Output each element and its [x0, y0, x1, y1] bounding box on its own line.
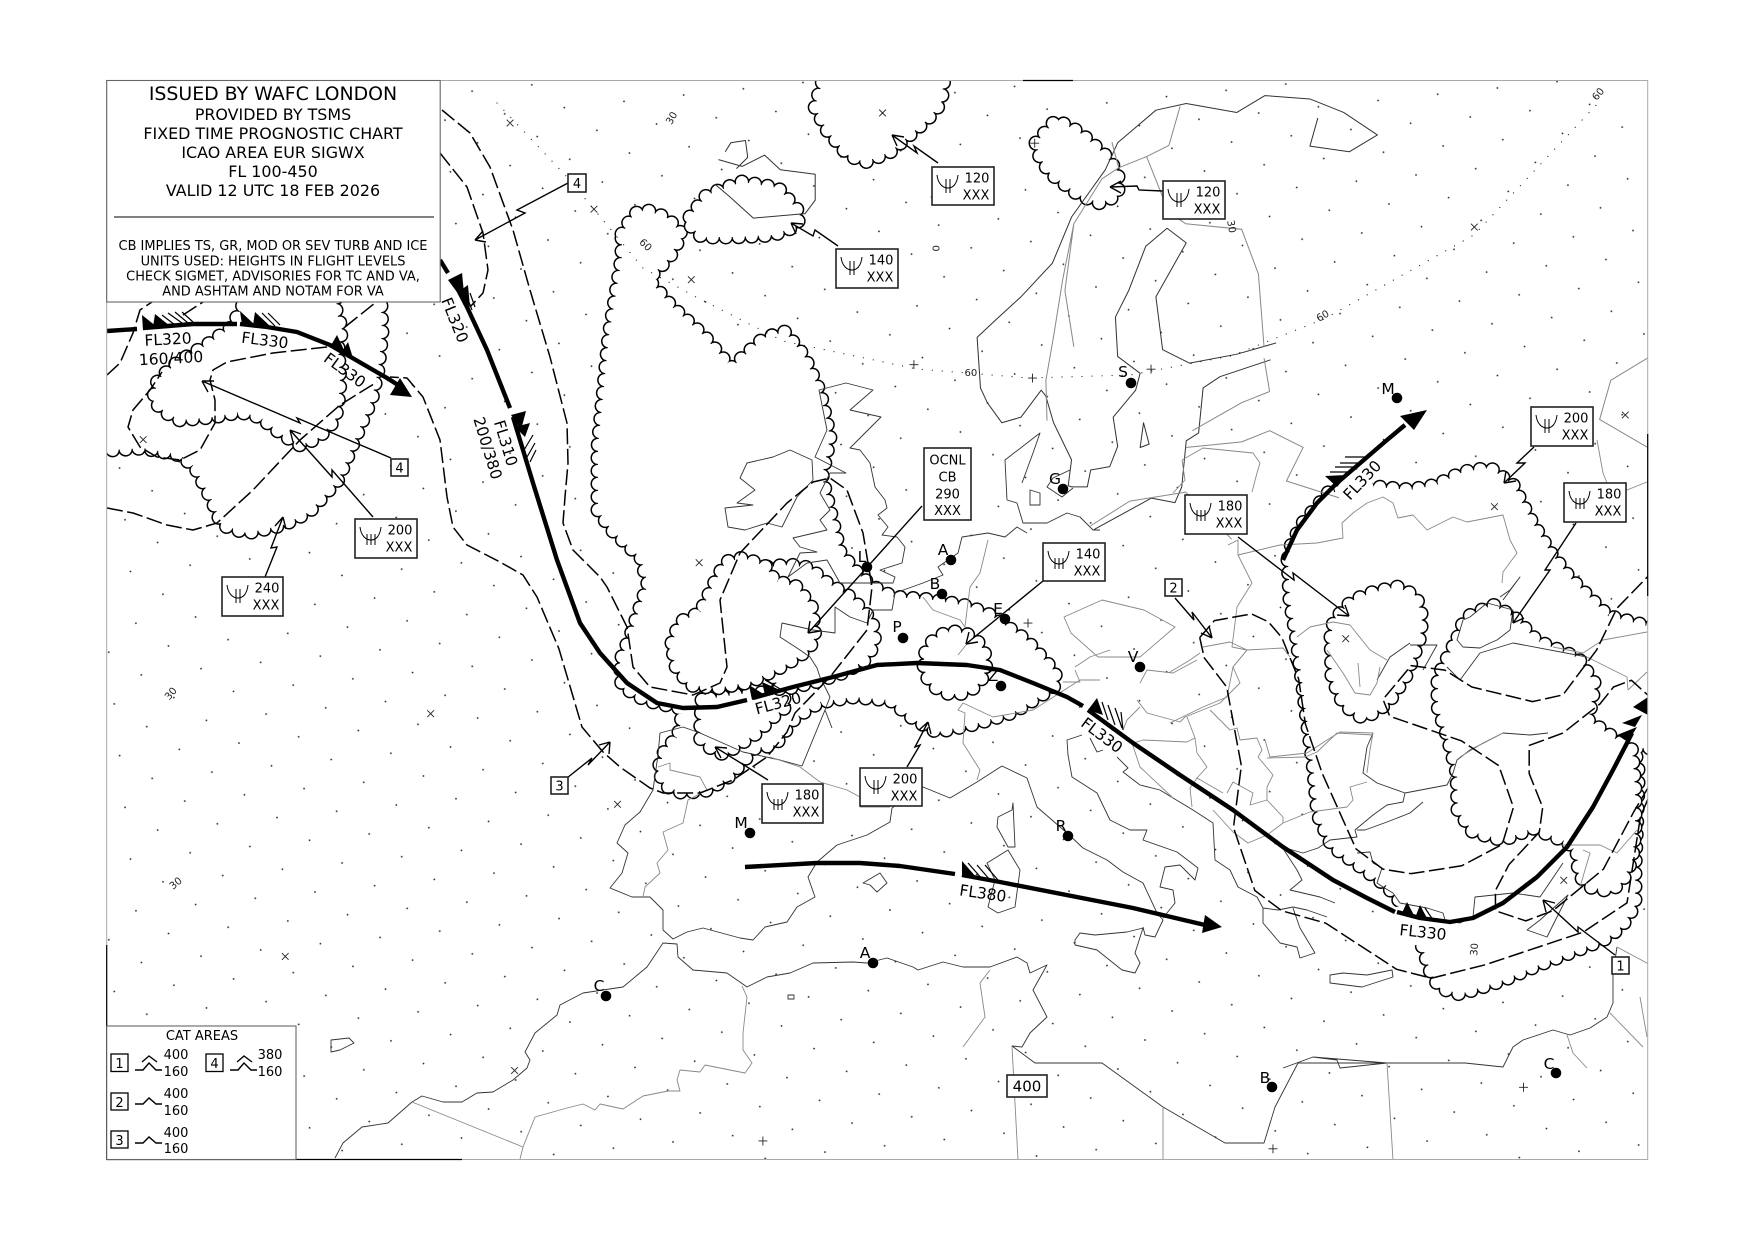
grid labels and crosses	[140, 86, 1629, 1153]
grid labels and crosses: 60	[1315, 309, 1331, 325]
CB box 140 central: 140	[1076, 548, 1100, 562]
grid labels and crosses: 60	[637, 237, 653, 254]
legend row 1 right: 380	[258, 1048, 282, 1063]
CAT tag 4 west: 4	[395, 462, 404, 476]
grid labels and crosses: 60	[965, 368, 977, 379]
CB note: CB IMPLIES TS, GR, MOD OR SEV TURB AND ICE	[119, 239, 427, 254]
CB box 120 north: 120	[965, 172, 989, 186]
flight level labels: FL320	[437, 295, 472, 345]
CB box 180 Iberia: XXX	[793, 806, 819, 820]
CB note: AND ASHTAM AND NOTAM FOR VA	[162, 284, 384, 300]
legend row 1	[111, 1048, 188, 1080]
CAT tag 3	[551, 777, 568, 794]
aerodrome markers: G	[1049, 470, 1061, 488]
legend row 3: 400	[164, 1126, 188, 1141]
grid labels and crosses: 30	[664, 110, 680, 127]
legend row 3: 160	[164, 1142, 188, 1157]
CAT tag 4 north: 4	[573, 177, 581, 192]
OCNL CB box: CB	[938, 470, 956, 486]
CAT tag 1: 1	[1616, 960, 1625, 974]
header details: ICAO AREA EUR SIGWX	[181, 143, 365, 162]
aerodrome markers: B	[1260, 1069, 1270, 1087]
chart frame	[107, 80, 1648, 1160]
aerodrome markers: C	[594, 977, 604, 995]
grid labels and crosses: 30	[163, 686, 180, 703]
OCNL CB box: XXX	[934, 504, 961, 519]
CB box 180 Iberia	[762, 784, 823, 823]
flight level labels: FL380	[958, 881, 1008, 906]
legend row 1: 160	[164, 1065, 188, 1080]
CB box 200 east: 200	[1564, 412, 1588, 426]
CAT tag 3: 3	[555, 780, 564, 794]
CB note: UNITS USED: HEIGHTS IN FLIGHT LEVELS	[141, 254, 405, 270]
grid labels and crosses: 0	[932, 245, 943, 252]
OCNL CB box: 290	[935, 488, 960, 502]
country borders	[412, 106, 1660, 1160]
aerodrome markers: V	[1128, 648, 1139, 666]
CB box 180 east: 180	[1597, 488, 1621, 502]
aerodrome markers: A	[860, 944, 871, 962]
aerodrome markers: A	[938, 541, 949, 559]
CB box 200 west: XXX	[386, 540, 412, 556]
grid labels and crosses: 60	[1590, 86, 1607, 103]
coastlines	[331, 96, 1617, 1158]
flight level labels: FL310	[490, 418, 521, 468]
legend row 2	[111, 1087, 188, 1119]
legend row 1: 400	[164, 1048, 188, 1063]
CB box 200 south	[860, 768, 922, 806]
aerodrome markers: M	[734, 814, 748, 832]
CB box 140 central: XXX	[1074, 564, 1100, 580]
OCNL CB box: OCNL	[929, 454, 966, 468]
header details	[143, 105, 403, 200]
aerodrome markers: B	[930, 575, 940, 593]
CB box 200 east: XXX	[1562, 428, 1588, 444]
flight level labels: FL330	[240, 329, 289, 352]
legend row 3	[111, 1126, 188, 1157]
aerodrome markers: S	[1118, 363, 1128, 381]
flight level labels: 160/400	[138, 348, 204, 369]
CB box 200 south: 200	[893, 772, 917, 788]
CB box 180 Poland	[1185, 495, 1247, 534]
aerodrome markers: L	[858, 548, 867, 566]
CB box 180 Iberia: 180	[795, 788, 819, 804]
CB box 200 west: 200	[388, 524, 412, 538]
leader arrows	[202, 135, 1615, 955]
CB box 240: XXX	[253, 598, 279, 614]
header details: FIXED TIME PROGNOSTIC CHART	[143, 124, 403, 143]
flight level labels: FL330	[1399, 921, 1447, 944]
CB box 180 east: XXX	[1595, 504, 1621, 520]
legend row 2: 400	[164, 1087, 188, 1102]
legend row 1: 1	[115, 1057, 124, 1072]
flight level labels: FL330	[1340, 457, 1385, 504]
header details: PROVIDED BY TSMS	[195, 105, 351, 124]
flight level labels: FL330	[1077, 714, 1126, 757]
flight level labels: FL330	[320, 349, 369, 392]
CB box 200 south: XXX	[891, 790, 917, 804]
legend row 3: 3	[115, 1134, 124, 1149]
aerodrome markers: E	[993, 600, 1003, 618]
grid labels and crosses: 30	[1469, 943, 1481, 956]
jet arrowheads and wind barbs	[142, 273, 1648, 933]
aerodrome markers: C	[1544, 1055, 1554, 1073]
title: ISSUED BY WAFC LONDON	[149, 83, 397, 105]
legend title: CAT AREAS	[166, 1029, 238, 1044]
aerodrome markers: M	[1381, 380, 1395, 398]
CAT tag 4 west	[391, 459, 408, 476]
legend row 1 right: 4	[210, 1057, 219, 1072]
CB box 180 Poland: 180	[1218, 500, 1242, 514]
flight level labels: FL320	[753, 689, 803, 718]
CB box 120 north: XXX	[963, 188, 989, 204]
header details: VALID 12 UTC 18 FEB 2026	[166, 181, 380, 200]
CB box 180 east	[1564, 483, 1626, 522]
legend row 1 right: 160	[258, 1065, 282, 1080]
CB box 120 Norway: 120	[1196, 186, 1220, 200]
CAT tag 1	[1612, 957, 1629, 974]
CB note	[119, 239, 427, 300]
CB box 140 Iceland	[836, 249, 898, 288]
cloud areas: scalloped CB outlines	[80, 70, 1700, 994]
grid labels and crosses: 30	[168, 876, 185, 892]
header details: FL 100-450	[228, 162, 318, 181]
aerodrome markers	[594, 363, 1561, 1092]
CB note: CHECK SIGMET, ADVISORIES FOR TC AND VA,	[126, 270, 420, 284]
CAT tag 2: 2	[1169, 582, 1178, 596]
legend row 2: 2	[115, 1096, 124, 1111]
panel: CAT areas legend	[107, 1026, 296, 1160]
CB box 240	[222, 577, 283, 616]
OCNL CB box	[924, 448, 971, 520]
tropopause height box 400: 400	[1013, 1078, 1041, 1096]
CB box 140 central	[1043, 543, 1105, 581]
CAT tag 2	[1165, 579, 1182, 596]
CAT tag 4 north	[568, 174, 586, 192]
aerodrome markers: Z	[988, 667, 998, 685]
grid dots	[107, 80, 1648, 1160]
CB box 180 Poland: XXX	[1216, 516, 1242, 532]
flight level labels: 200/380	[469, 415, 505, 482]
jet streams	[107, 260, 1648, 933]
flight level labels	[138, 295, 1447, 944]
latitude dotted lines	[497, 101, 1600, 378]
CB box 240: 240	[255, 582, 279, 596]
aerodrome markers: R	[1056, 817, 1067, 835]
legend row 2: 160	[164, 1104, 188, 1119]
CAT area dashed boundaries	[107, 110, 1656, 978]
CB box 140 Iceland: 140	[869, 254, 893, 268]
CB box 200 east	[1531, 407, 1593, 446]
CB box 120 north	[932, 167, 994, 205]
tropopause height box 400	[1007, 1075, 1047, 1097]
CB box 140 Iceland: XXX	[867, 270, 893, 286]
CB box 120 Norway: XXX	[1194, 202, 1220, 218]
legend row 1 right	[206, 1048, 282, 1080]
panel: chart header	[107, 80, 440, 302]
aerodrome markers: P	[892, 618, 902, 636]
grid labels and crosses: 30	[1224, 219, 1237, 234]
CB box 120 Norway	[1163, 181, 1225, 219]
flight level labels: FL320	[144, 329, 192, 350]
CB box 200 west	[355, 519, 417, 558]
